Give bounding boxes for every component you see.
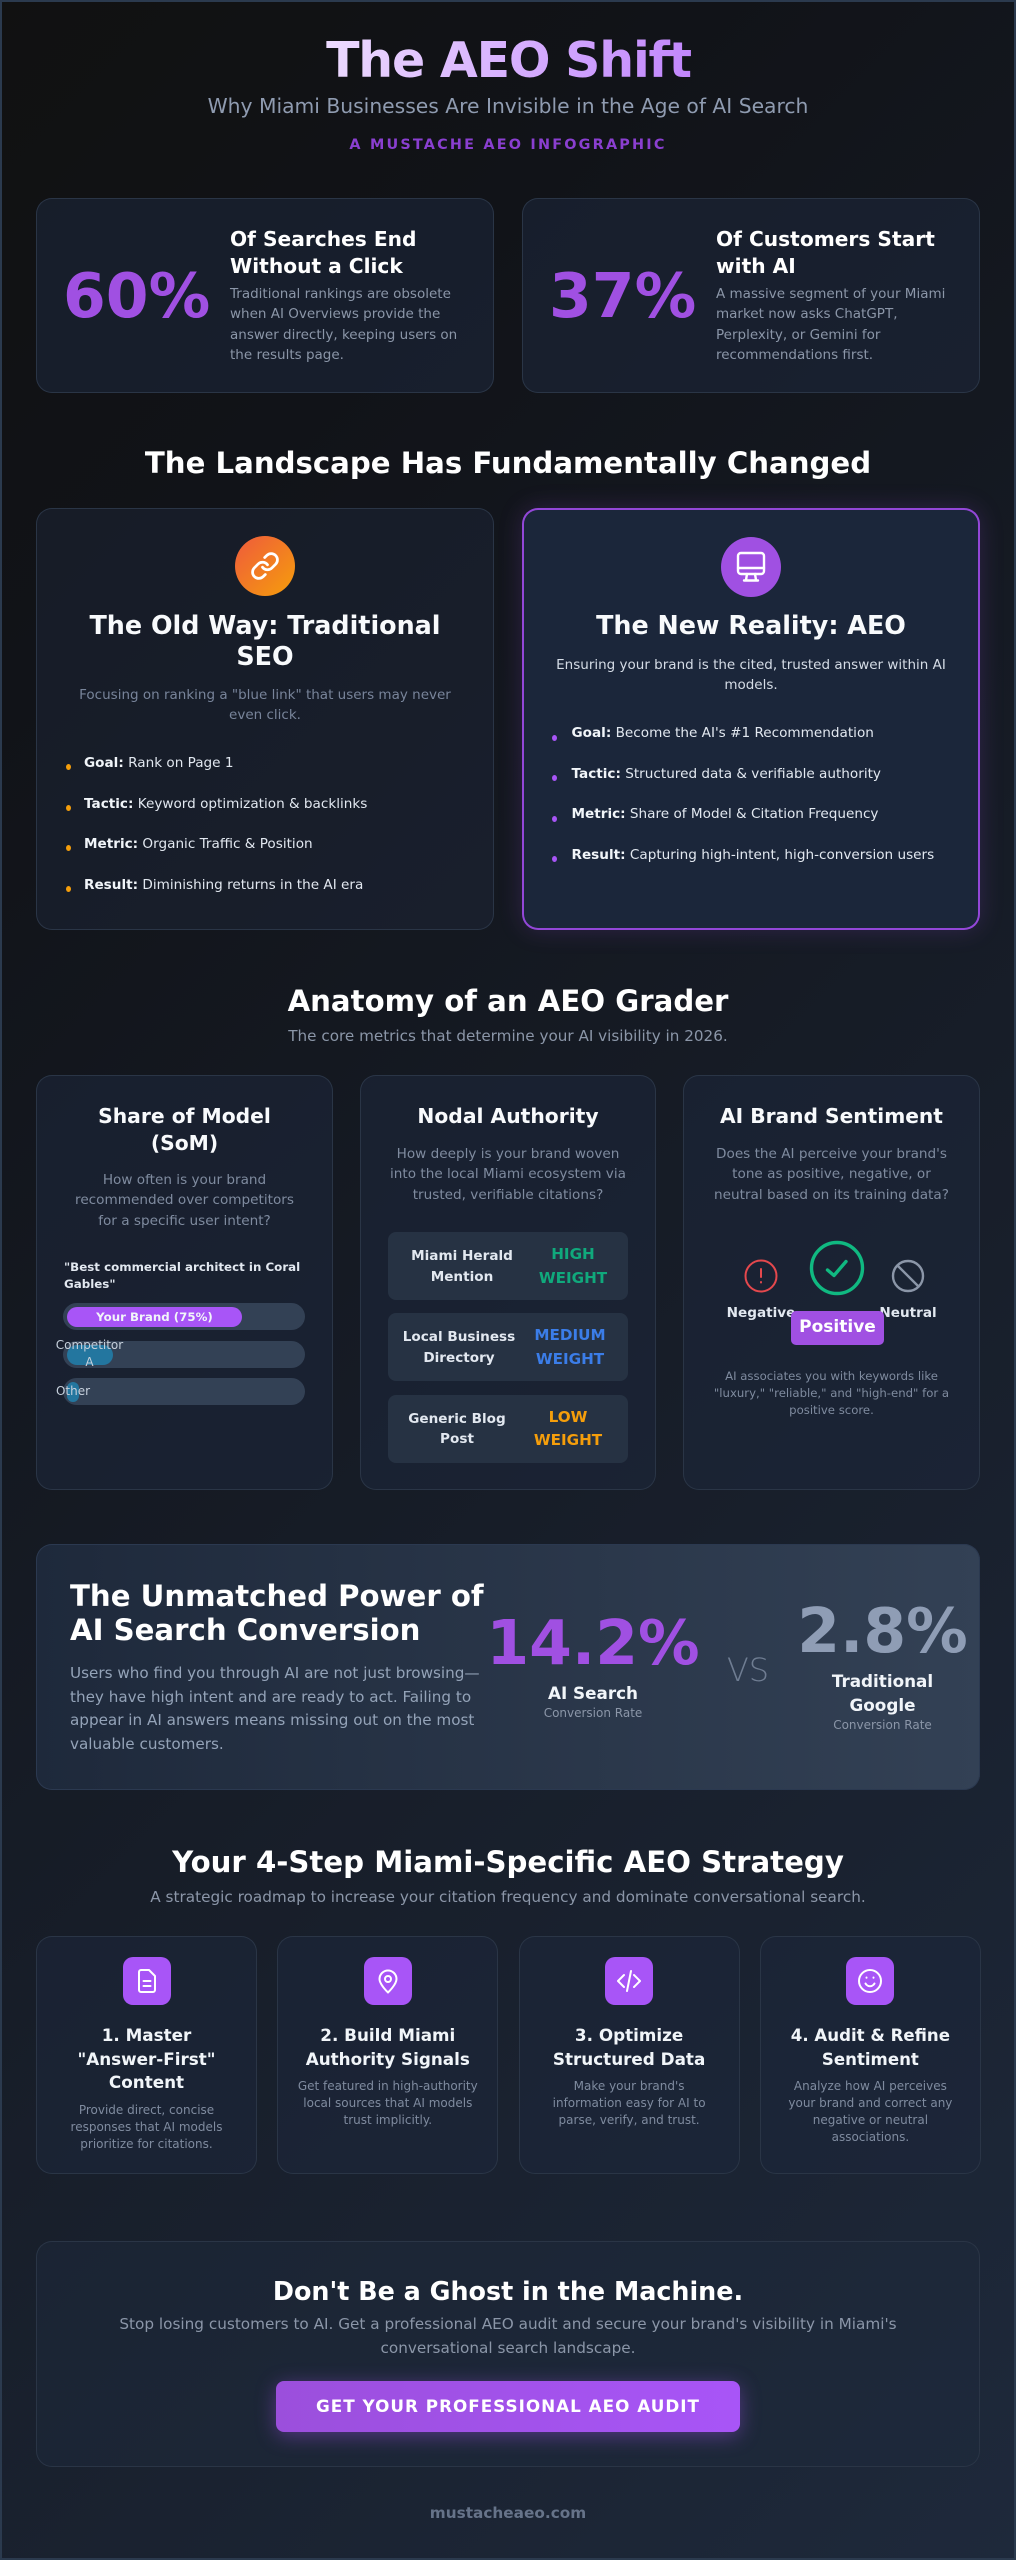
description: parse, verify, and trust.	[559, 2113, 700, 2127]
description: How often is your brand	[103, 1172, 266, 1188]
heading: SEO	[236, 641, 294, 671]
bar: competitor A: A	[85, 1355, 94, 1369]
comparison list	[66, 755, 367, 893]
section heading: landscape: The Landscape Has Fundamentally Changed	[145, 446, 871, 480]
query text: "Best commercial architect in Coral	[64, 1260, 300, 1274]
description: for a specific user intent?	[98, 1213, 271, 1229]
bar: other: Other	[56, 1384, 90, 1398]
description: Users who find you through AI are not just browsing—	[70, 1664, 480, 1682]
stat heading	[716, 227, 935, 278]
description: models.	[724, 677, 778, 693]
description: recommended over competitors	[75, 1192, 294, 1208]
row: Miami Herald: HIGH	[551, 1245, 595, 1263]
heading: The Unmatched Power of	[70, 1579, 484, 1613]
heading	[306, 2025, 470, 2069]
panel: step 3	[519, 1936, 740, 2174]
description: associations.	[832, 2130, 909, 2144]
description: Get featured in high-authority	[298, 2079, 478, 2093]
comparison list: Result: Capturing high-intent, high-conversion users	[572, 847, 934, 863]
description: appear in AI answers means missing out on the most	[70, 1711, 474, 1729]
comparison list: Tactic: Keyword optimization & backlinks	[84, 796, 367, 812]
description	[119, 2315, 897, 2357]
icon: monitor	[721, 537, 781, 597]
bar: other	[63, 1378, 305, 1405]
stat: traditional google	[797, 1595, 968, 1732]
description: conversational search landscape.	[380, 2339, 636, 2357]
stat number: 60%	[63, 260, 210, 332]
heading	[98, 1104, 271, 1155]
description	[79, 687, 451, 723]
note: positive score.	[789, 1403, 874, 1417]
panel: step 1	[36, 1936, 257, 2174]
heading: Authority Signals	[306, 2049, 470, 2069]
section heading: strategy: Your 4-Step Miami-Specific AEO Strategy	[172, 1845, 844, 1879]
stat description	[716, 286, 945, 363]
stat: traditional google: Traditional	[832, 1671, 933, 1691]
stat description: market now asks ChatGPT,	[716, 306, 898, 322]
stat heading: Of Searches End	[230, 227, 416, 251]
bar: competitor A: Competitor	[56, 1338, 123, 1352]
stat: traditional google: Google	[850, 1695, 915, 1715]
stat: AI search: AI Search	[548, 1683, 638, 1703]
stat description: when AI Overviews provide the	[230, 306, 440, 322]
row: Generic Blog: Generic Blog	[408, 1410, 506, 1426]
panel: nodal authority	[360, 1075, 656, 1490]
panel: brand sentiment	[683, 1075, 980, 1490]
note: "luxury," "reliable," and "high-end" for a	[714, 1386, 949, 1400]
label: negative: Negative	[727, 1305, 795, 1321]
description: negative or neutral	[813, 2113, 928, 2127]
description: your brand and correct any	[788, 2096, 952, 2110]
heading: The New Reality: AEO	[596, 610, 906, 640]
bar: your brand	[63, 1303, 305, 1330]
button: GET YOUR PROFESSIONAL AEO AUDIT	[316, 2396, 700, 2416]
description	[788, 2079, 952, 2144]
stat description: the results page.	[230, 347, 344, 363]
heading: Sentiment	[822, 2050, 919, 2069]
panel: old way	[36, 508, 494, 930]
heading: Content	[109, 2072, 184, 2092]
description	[390, 1146, 626, 1203]
row: Generic Blog: WEIGHT	[534, 1431, 602, 1449]
query text: Gables"	[64, 1277, 116, 1291]
description	[714, 1146, 949, 1203]
description: Make your brand's	[574, 2079, 685, 2093]
description: valuable customers.	[70, 1735, 224, 1753]
description: tone as positive, negative, or	[732, 1166, 931, 1182]
heading: 4. Audit & Refine	[791, 2026, 950, 2045]
comparison list: Tactic: Structured data & verifiable authority	[572, 766, 881, 782]
icon: positive	[810, 1240, 864, 1296]
section subheading: A strategic roadmap to increase your citation frequency and dominate conversational search.	[150, 1888, 866, 1906]
description: How deeply is your brand woven	[397, 1146, 619, 1162]
row: Local Business: WEIGHT	[536, 1350, 604, 1368]
note	[714, 1369, 949, 1417]
stat: traditional google: 2.8%	[797, 1595, 968, 1667]
row: Generic Blog: Post	[440, 1431, 474, 1447]
row: Miami Herald: Miami Herald	[411, 1248, 513, 1264]
comparison list: Metric: Share of Model & Citation Frequency	[572, 806, 878, 822]
icon: map pin	[364, 1957, 412, 2005]
section heading: anatomy: Anatomy of an AEO Grader	[288, 984, 728, 1018]
query text	[64, 1260, 300, 1291]
heading: "Answer-First"	[77, 2049, 216, 2069]
comparison list	[552, 725, 934, 863]
panel: step 2	[277, 1936, 498, 2174]
panel: 37% stat	[522, 198, 980, 393]
description: trust implicitly.	[344, 2113, 432, 2127]
icon: smile	[846, 1957, 894, 2005]
panel: conversion comparison	[36, 1544, 980, 1790]
description: Provide direct, concise	[79, 2103, 214, 2117]
row: Miami Herald	[388, 1232, 628, 1300]
heading: AI Brand Sentiment	[720, 1104, 943, 1128]
tagline: A MUSTACHE AEO INFOGRAPHIC	[349, 137, 667, 153]
description: into the local Miami ecosystem via	[390, 1166, 626, 1182]
section subheading: The core metrics that determine your AI visibility in 2026.	[288, 1027, 728, 1045]
row: Local Business: MEDIUM	[534, 1326, 606, 1344]
heading	[70, 1579, 484, 1647]
description	[553, 2079, 706, 2127]
heading: Structured Data	[553, 2049, 705, 2069]
description: they have high intent and are ready to act. Failing to	[70, 1688, 471, 1706]
heading	[89, 610, 441, 671]
description	[556, 657, 946, 693]
stat heading	[230, 227, 416, 278]
comparison list: Result: Diminishing returns in the AI era	[84, 877, 363, 893]
stat description: Traditional rankings are obsolete	[230, 286, 451, 302]
button	[276, 2381, 740, 2432]
icon: link	[235, 536, 295, 596]
footer: mustacheaeo.com	[430, 2504, 586, 2522]
stat: AI search: Conversion Rate	[544, 1706, 642, 1720]
heading	[553, 2025, 705, 2069]
badge: positive: Positive	[799, 1317, 876, 1337]
heading: 2. Build Miami	[320, 2025, 455, 2045]
stat description: answer directly, keeping users on	[230, 327, 457, 343]
stat heading: Without a Click	[230, 254, 403, 278]
icon: code	[605, 1957, 653, 2005]
panel: new reality	[522, 508, 980, 930]
vs label: VS	[727, 1651, 769, 1689]
heading: The Old Way: Traditional	[89, 610, 441, 640]
heading	[77, 2025, 216, 2092]
description: information easy for AI to	[553, 2096, 706, 2110]
row: Generic Blog: LOW	[549, 1408, 587, 1426]
stat: traditional google: Conversion Rate	[833, 1718, 932, 1732]
comparison list: Goal: Become the AI's #1 Recommendation	[572, 725, 874, 741]
description: Stop losing customers to AI. Get a professional AEO audit and secure your brand's visibility in Miami's	[119, 2315, 897, 2333]
badge: positive	[791, 1311, 884, 1345]
description: Focusing on ranking a "blue link" that users may never	[79, 687, 451, 703]
description: prioritize for citations.	[80, 2137, 213, 2151]
panel: share of model	[36, 1075, 333, 1490]
row: Generic Blog	[388, 1394, 628, 1462]
note: AI associates you with keywords like	[725, 1369, 938, 1383]
description: Does the AI perceive your brand's	[716, 1146, 947, 1162]
stat description: recommendations first.	[716, 347, 873, 363]
row: Local Business	[388, 1313, 628, 1381]
row: Local Business: Directory	[423, 1350, 495, 1366]
row: Miami Herald: Mention	[431, 1268, 493, 1284]
description: responses that AI models	[71, 2120, 222, 2134]
description: trusted, verifiable citations?	[413, 1187, 603, 1203]
subtitle: Why Miami Businesses Are Invisible in the Age of AI Search	[208, 94, 808, 118]
stat number: 37%	[549, 260, 696, 332]
row: Local Business: Local Business	[403, 1329, 515, 1345]
heading: AI Search Conversion	[70, 1613, 420, 1647]
stat: AI search	[486, 1607, 700, 1720]
heading: Nodal Authority	[417, 1104, 599, 1128]
icon: negative	[744, 1260, 778, 1292]
description: neutral based on its training data?	[714, 1187, 949, 1203]
panel: 60% stat	[36, 198, 494, 393]
stat heading: with AI	[716, 254, 796, 278]
description	[71, 2103, 222, 2151]
heading: 1. Master	[102, 2025, 191, 2045]
icon: neutral	[892, 1260, 924, 1292]
heading: Don't Be a Ghost in the Machine.	[273, 2276, 743, 2306]
heading: (SoM)	[151, 1131, 218, 1155]
description	[75, 1172, 294, 1229]
heading	[791, 2026, 950, 2069]
label: neutral: Neutral	[879, 1305, 937, 1321]
icon: document	[122, 1957, 170, 2005]
stat description	[230, 286, 457, 363]
description	[298, 2079, 478, 2127]
stat description: A massive segment of your Miami	[716, 286, 945, 302]
description: Ensuring your brand is the cited, trusted answer within AI	[556, 657, 946, 673]
description: local sources that AI models	[303, 2096, 472, 2110]
bar: your brand: Your Brand (75%)	[96, 1310, 213, 1324]
comparison list: Goal: Rank on Page 1	[84, 755, 234, 771]
comparison list: Metric: Organic Traffic & Position	[84, 836, 313, 852]
description	[70, 1664, 480, 1753]
stat: AI search: 14.2%	[486, 1607, 700, 1679]
bar: competitor A	[63, 1341, 305, 1368]
description: even click.	[229, 707, 301, 723]
panel: call to action	[36, 2241, 980, 2467]
description: Analyze how AI perceives	[794, 2079, 947, 2093]
heading: Share of Model	[98, 1104, 271, 1128]
stat description: Perplexity, or Gemini for	[716, 327, 880, 343]
panel: step 4	[760, 1936, 981, 2174]
row: Miami Herald: WEIGHT	[539, 1268, 607, 1286]
heading: 3. Optimize	[575, 2025, 683, 2045]
stat heading: Of Customers Start	[716, 227, 935, 251]
title: The AEO Shift	[326, 32, 691, 89]
